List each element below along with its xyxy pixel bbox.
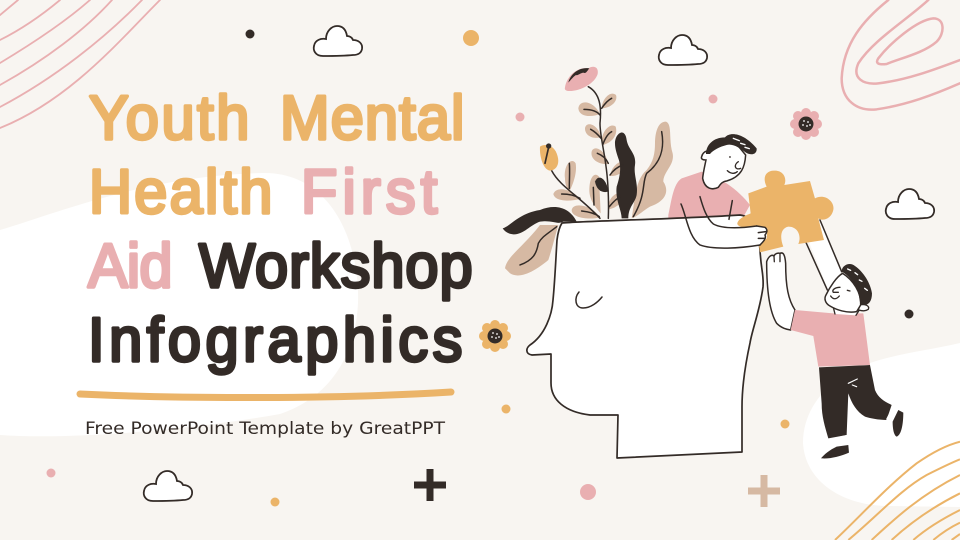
illustration: arm of person on top [681, 197, 767, 248]
facial features [727, 157, 741, 173]
title: Infographics [88, 305, 462, 374]
subtitle: Free PowerPoint Template by GreatPPT [85, 419, 446, 439]
second arm and hand [767, 253, 795, 330]
title: Youth [89, 83, 249, 152]
illustration: puzzle piece [737, 171, 833, 252]
illustration: plants growing from head [503, 67, 673, 275]
head: closed eye [576, 292, 602, 308]
contour lines: top right pink [842, 0, 960, 110]
contour lines: top left pink [0, 0, 160, 128]
ear [858, 304, 869, 311]
hair highlights [848, 269, 867, 290]
icon: beige plus [748, 475, 780, 507]
title [88, 83, 473, 374]
background blob: left white [0, 173, 358, 436]
trouser creases [848, 379, 857, 387]
plant: small dark leaf [595, 178, 608, 192]
title: Mental [280, 83, 464, 152]
hair [842, 264, 872, 305]
background blob: bottom right white [803, 343, 960, 507]
shoes [821, 410, 903, 459]
title underline [80, 392, 451, 398]
hair [706, 134, 757, 154]
socks [832, 408, 898, 448]
neck [833, 305, 860, 315]
contour lines: bottom right gold [835, 442, 960, 540]
trousers [819, 365, 892, 438]
plant: stems and veins [520, 87, 663, 265]
illustration: head [527, 215, 763, 458]
plant: black wavy leaf [615, 133, 637, 218]
title: First [301, 157, 437, 226]
title: Workshop [199, 231, 473, 300]
icon: cloud right [886, 189, 934, 219]
shirt [791, 310, 870, 367]
plant: yellow tulip [540, 143, 558, 171]
illustration: lower person [767, 253, 903, 459]
icon: cloud top centre [314, 26, 362, 56]
plant: beige leaves [505, 94, 673, 275]
icon: pink flower [790, 108, 822, 140]
illustration: person on top shirt [668, 134, 757, 220]
icon: cloud top right [659, 35, 707, 65]
face [701, 140, 746, 189]
icon: dark plus [414, 469, 446, 501]
title: Health [89, 157, 272, 226]
fingers [774, 253, 780, 262]
title: Aid [88, 231, 172, 300]
facial features [831, 287, 850, 299]
plant: left black leaf [503, 207, 577, 234]
icon: gold flower [479, 320, 511, 352]
decorative dots [46, 30, 914, 506]
face [825, 273, 861, 312]
illustration: raised arm of lower person [800, 220, 842, 290]
plant: pink flower [565, 67, 598, 91]
icon: cloud bottom left [144, 471, 192, 501]
hair highlights [733, 138, 749, 149]
